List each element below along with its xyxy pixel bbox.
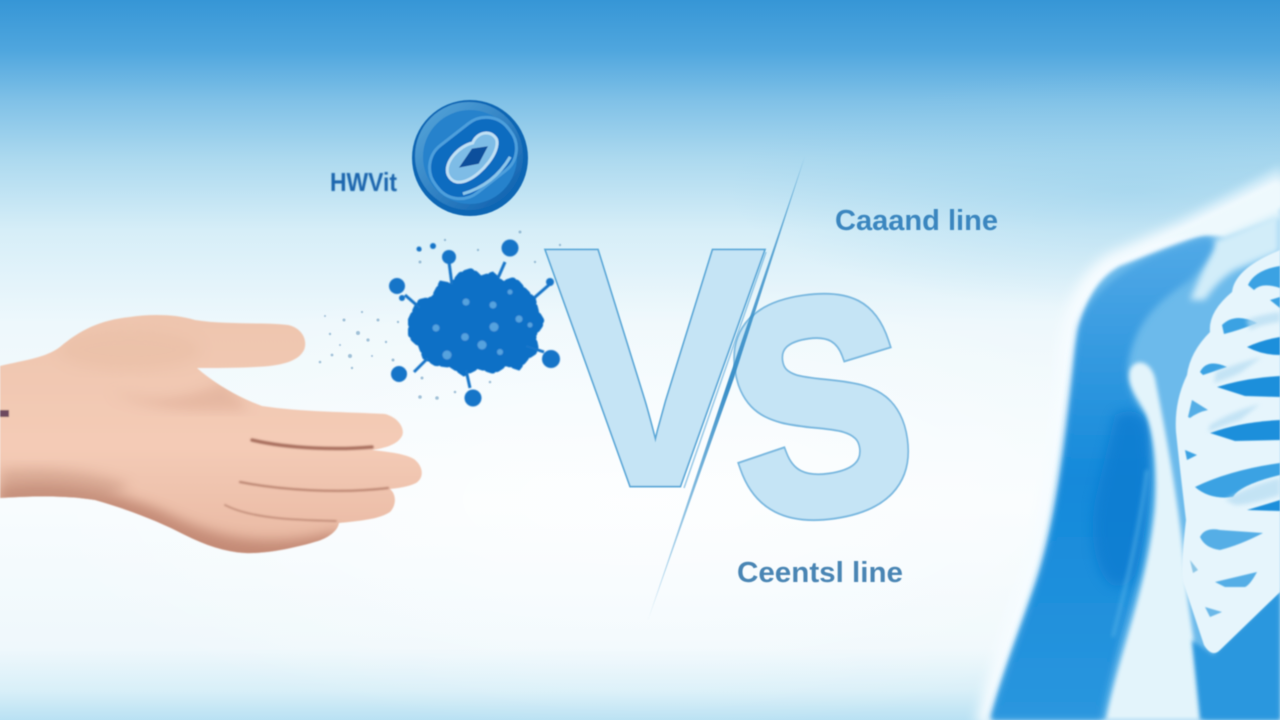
body halo: [982, 180, 1280, 720]
torso base: [992, 208, 1280, 720]
large VS lettering: [545, 178, 929, 585]
large VS lettering: S: [708, 228, 929, 585]
large VS lettering: V: [545, 178, 767, 558]
lighter rib bands: [1208, 312, 1280, 505]
neck and collar highlight: [1110, 182, 1280, 262]
illustration: human hand: [0, 315, 422, 570]
spore stems: [405, 262, 550, 388]
side of chest, pale: [1106, 362, 1205, 720]
label: upper right caption: Caaand line: [835, 205, 998, 237]
large VS lettering: V: [545, 178, 767, 558]
armpit shadow: [1093, 411, 1151, 587]
ribcage: [1176, 250, 1280, 653]
arm: [990, 238, 1213, 720]
diagonal divider: [648, 156, 805, 620]
label: lower caption: Ceentsl line: [737, 557, 903, 589]
illustration: scattered particles: [319, 230, 561, 400]
finger separation creases: [225, 440, 388, 521]
lower abdomen blue: [1192, 590, 1280, 720]
icon: coin badge: [412, 100, 528, 216]
illustration: blue pathogen cluster: [389, 240, 560, 406]
rib gaps: [1185, 266, 1280, 617]
neck colour above shoulder: [1170, 165, 1280, 240]
lighter specks: [432, 290, 532, 360]
hand shading clipped to outline: [0, 384, 336, 554]
wrist mark: [0, 410, 9, 417]
satellite spores: [389, 240, 560, 406]
label: left icon caption: HWVit: [330, 167, 397, 197]
arm highlight line: [1113, 470, 1147, 637]
illustration: human torso with ribcage: [982, 165, 1280, 720]
large VS lettering: S: [708, 228, 929, 585]
